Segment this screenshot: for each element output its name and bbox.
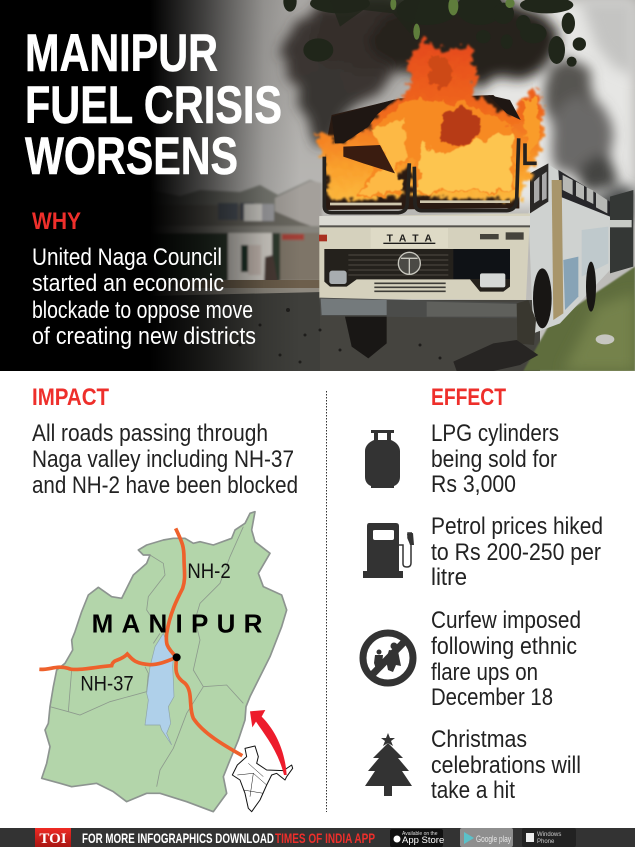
state outline [42,512,287,812]
district borders [50,527,243,787]
badge: Windows Phone: Windows [537,832,561,838]
LPG text: LPG cylinders [431,420,559,447]
badge: Google play [460,828,513,847]
title [25,24,282,186]
wheels and debris [345,317,387,358]
photo: burning bus [0,0,635,371]
label: NH-37: NH-37 [80,673,134,696]
curfew text: Curfew imposed [431,607,581,634]
street scene [150,180,322,285]
effect: curfew [363,607,581,711]
TOI logo [35,828,71,847]
curfew text: December 18 [431,684,553,711]
heading: why: WHY [32,208,81,235]
impact text: Naga valley including NH-37 [32,446,294,473]
badge: App Store [390,829,444,847]
speckled debris [238,308,442,364]
bus front [319,213,530,300]
petrol text: Petrol prices hiked [431,513,603,540]
NH-37 road [39,654,177,669]
curfew text: flare ups on [431,659,538,686]
why text: of creating new districts [32,323,256,350]
LPG text: being sold for [431,446,557,473]
christmas text [431,726,581,804]
heading: effect: EFFECT [431,384,506,411]
icon: fuel pump [363,523,414,578]
window rims [324,138,537,213]
petrol text: litre [431,564,467,591]
LPG text [431,420,559,498]
flames [315,40,543,200]
road [160,280,320,288]
badge: Windows Phone: Phone [537,839,555,845]
christmas text: take a hit [431,777,515,804]
icon: no running people [363,633,413,683]
icon: gas cylinder [365,430,400,488]
bumper [319,298,522,318]
dark cab interior [323,95,520,210]
divider [326,391,328,812]
impact text: and NH-2 have been blocked [32,472,298,499]
grille [324,249,510,292]
label: MANIPUR: MANIPUR [92,609,263,639]
curfew text: following ethnic [431,633,577,660]
TATA badge: TATA [387,234,433,245]
heading: impact: IMPACT [32,384,109,411]
impact text: All roads passing through [32,420,268,447]
effect: petrol [363,513,603,591]
far truck [610,190,633,273]
footer bar: TIMES OF INDIA APP [275,830,375,846]
why text: blockade to oppose move [32,297,253,324]
christmas text: celebrations will [431,752,581,779]
badge: Google play: Google play [476,834,511,844]
inset map: India [232,746,293,812]
tree leaves [283,0,586,67]
footer text: FOR MORE INFOGRAPHICS DOWNLOAD [82,830,274,846]
badge: App Store: App Store [402,835,444,846]
smoke [280,0,633,223]
map: Manipur [39,512,293,812]
effect: LPG [365,420,559,498]
footer bar [0,828,635,847]
left fade [0,0,300,371]
title: MANIPUR [25,24,218,83]
TOI logo: TOI [39,831,67,847]
bus side [528,163,610,333]
red arrow [250,710,287,775]
inset state lines [237,763,267,797]
lake and valley [145,633,174,745]
curfew text [431,607,581,711]
LPG text: Rs 3,000 [431,471,516,498]
NH-2 road [166,528,185,657]
petrol text [431,513,603,591]
title: WORSENS [25,127,238,186]
icon: christmas tree [365,733,412,796]
effect: christmas [365,726,581,804]
why text: started an economic [32,270,224,297]
Imphal dot [173,653,181,661]
dark window area [332,99,395,143]
sky right [480,0,635,207]
why text: United Naga Council [32,244,222,271]
southern road [176,657,242,756]
grass [523,267,635,371]
why text [32,244,256,350]
impact text [32,420,298,499]
label: NH-2: NH-2 [187,560,231,583]
title: FUEL CRISIS [25,76,282,135]
badge: Windows Phone [522,828,576,847]
christmas text: Christmas [431,726,527,753]
petrol text: to Rs 200-250 per [431,539,601,566]
badge: App Store: Available on the [402,831,438,837]
